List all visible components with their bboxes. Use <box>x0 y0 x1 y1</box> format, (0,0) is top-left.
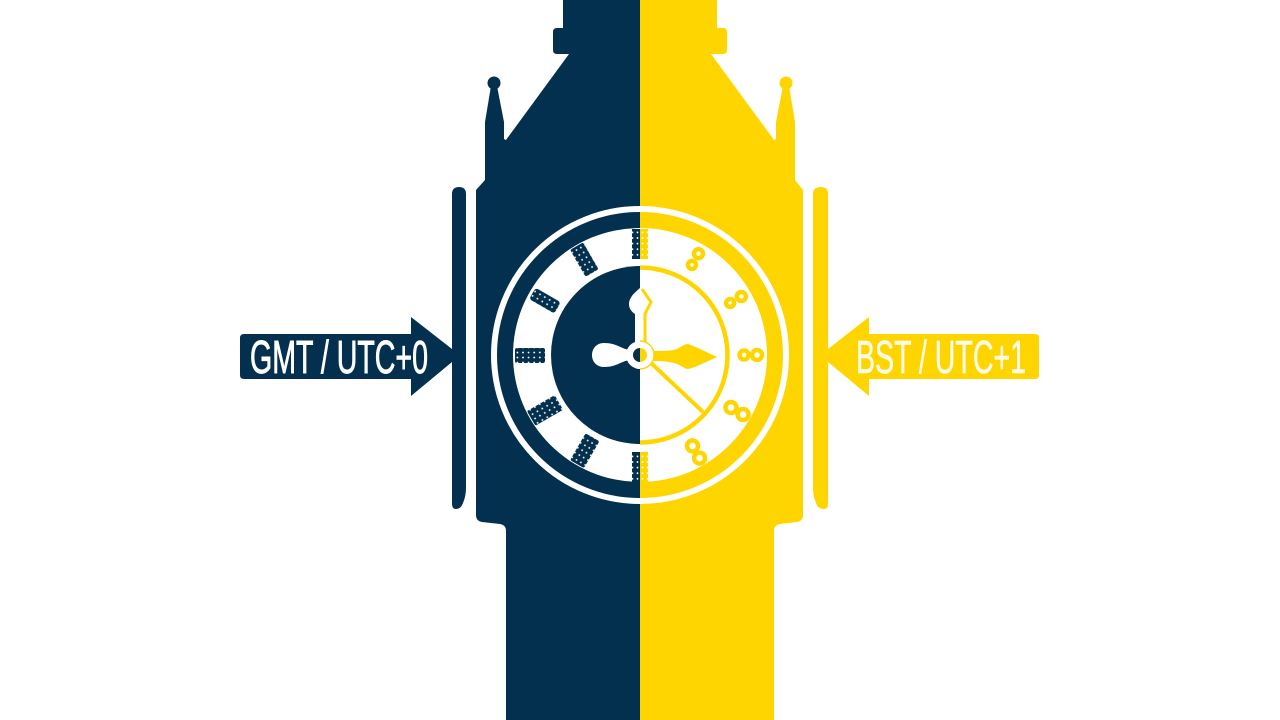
tower: yellow right half <box>640 0 803 720</box>
inner dial: yellow ring half <box>640 268 727 442</box>
hand: yellow pointer <box>652 344 717 369</box>
outer white ring <box>494 209 786 501</box>
numeral marks: yellow side <box>640 229 762 482</box>
side bar: navy <box>452 187 466 509</box>
arrow label: GMT / UTC+0: GMT / UTC+0 <box>250 331 428 383</box>
white numeral band <box>513 228 767 482</box>
arrow label: BST / UTC+1: BST / UTC+1 <box>856 331 1026 383</box>
hand: vertical white part <box>629 288 640 345</box>
numeral marks: navy side <box>515 229 640 482</box>
tower: navy left half <box>476 0 640 720</box>
clock face <box>494 209 786 501</box>
inner dial: navy half <box>551 266 640 444</box>
arrow label: GMT / UTC+0 <box>240 317 452 396</box>
hand: vertical yellow outline <box>642 289 651 346</box>
clock centre hub <box>626 341 654 369</box>
hand: yellow second hand <box>650 362 703 412</box>
side bar: yellow <box>813 187 828 509</box>
arrow label: BST / UTC+1 <box>828 317 1039 396</box>
hand: white left hand <box>592 343 630 367</box>
